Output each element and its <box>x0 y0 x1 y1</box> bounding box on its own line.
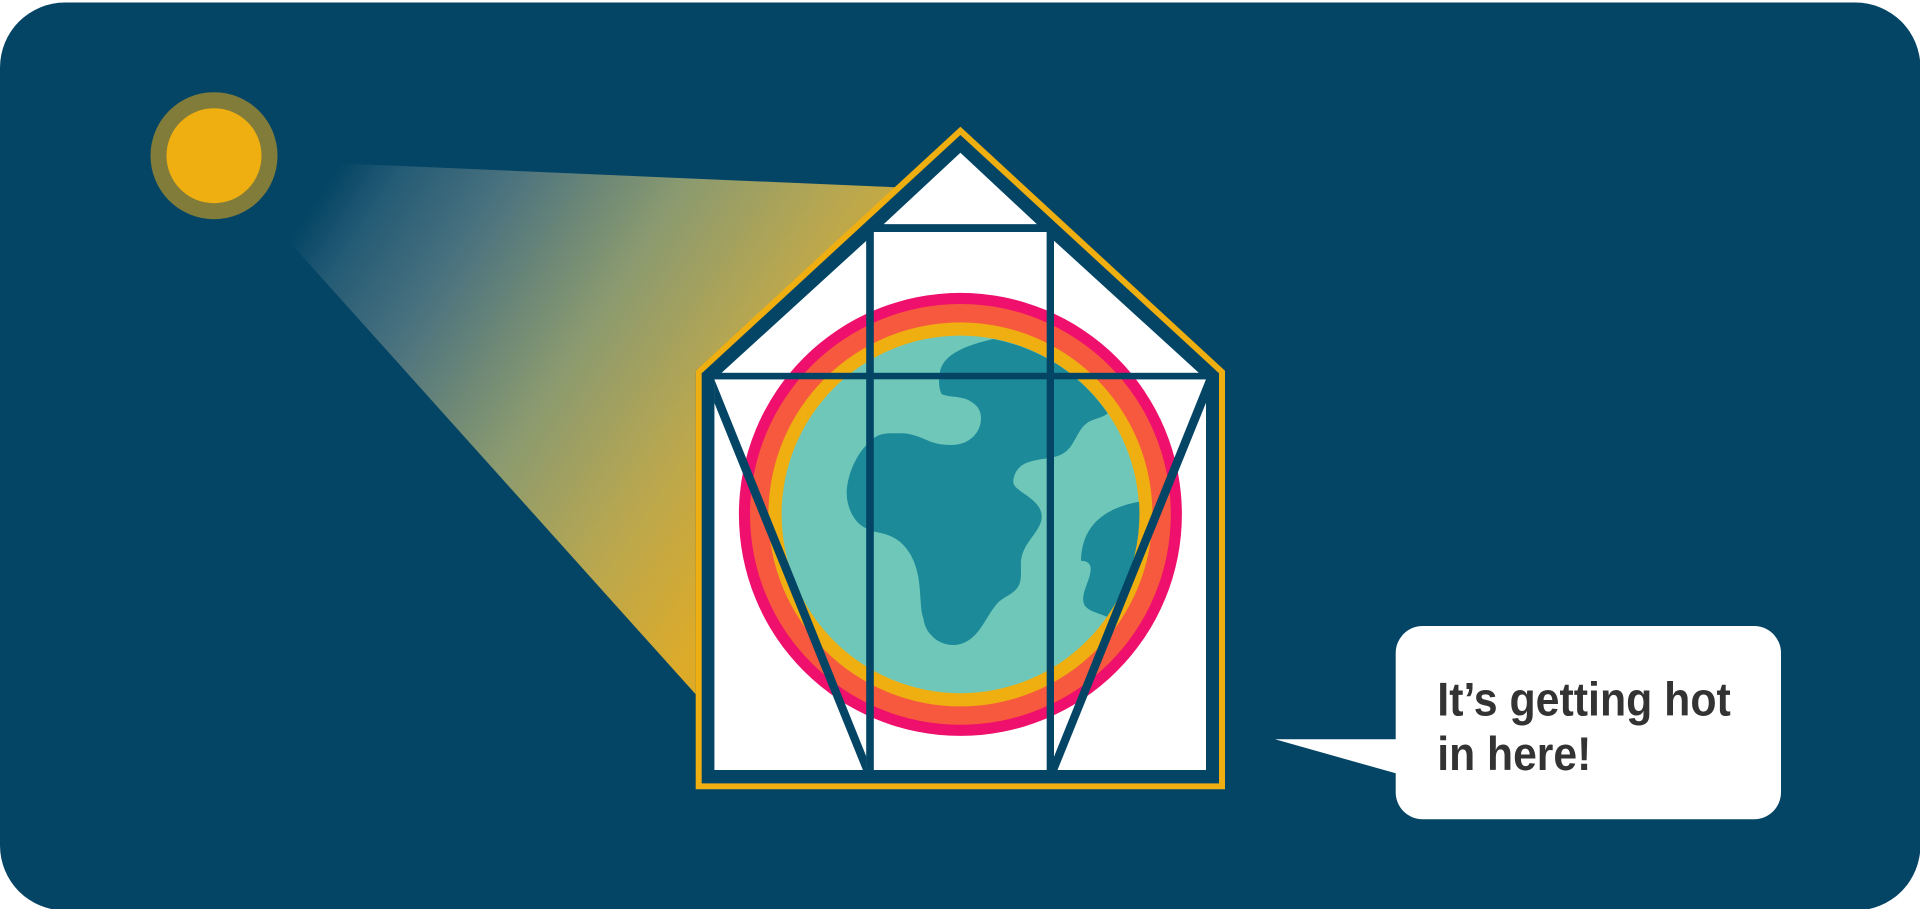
speech bubble text <box>1437 673 1731 780</box>
greenhouse outer gold outline <box>696 127 1225 789</box>
greenhouse window bars <box>702 224 1219 783</box>
speech bubble text: in here! <box>1437 727 1591 780</box>
greenhouse navy frame <box>702 135 1219 783</box>
earth ocean <box>782 336 1139 693</box>
callout: speech bubble <box>1275 626 1781 819</box>
speech bubble text: It’s getting hot <box>1437 673 1731 726</box>
earth continent: right landmass <box>1081 502 1139 617</box>
earth continent: main landmass <box>847 339 1108 645</box>
earth with heat rings <box>739 293 1182 736</box>
heat ring: pink <box>739 293 1182 736</box>
speech bubble shape with tail <box>1275 626 1781 819</box>
icon: sun <box>150 92 278 219</box>
greenhouse white window panes <box>714 153 1206 770</box>
greenhouse with earth <box>696 127 1225 789</box>
heat ring: gold <box>768 322 1152 706</box>
sunlight beam <box>214 158 896 694</box>
heat ring: orange <box>750 304 1171 725</box>
